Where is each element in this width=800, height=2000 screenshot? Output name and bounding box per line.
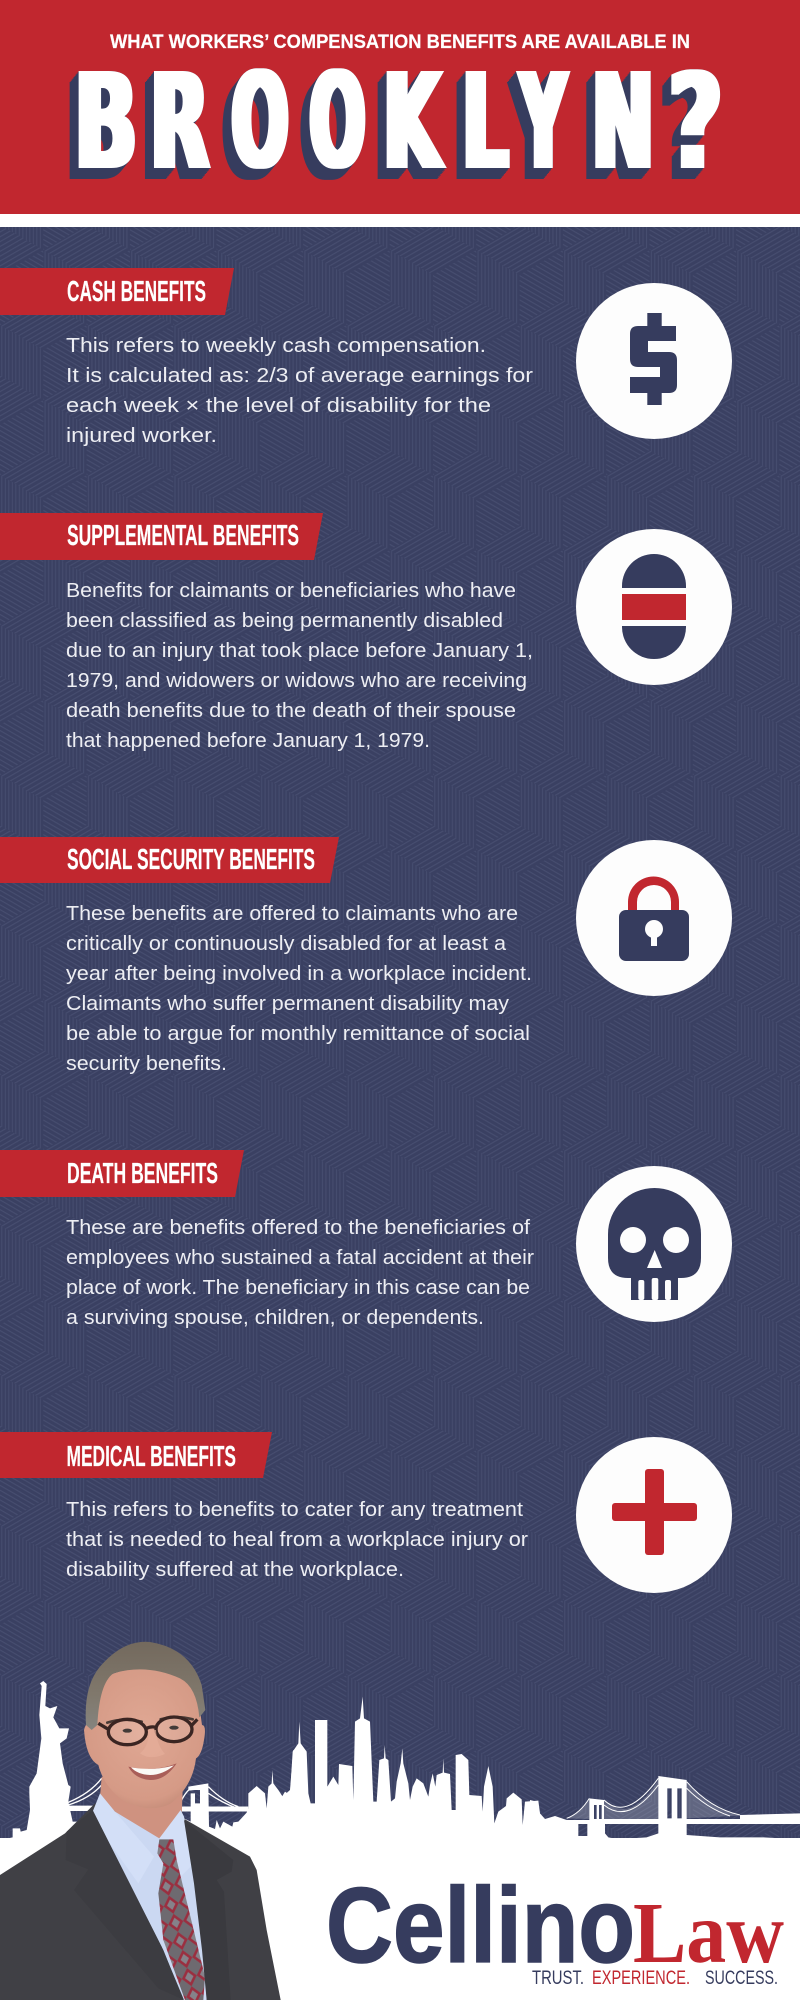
text block: cash benefits — [66, 335, 533, 447]
neck — [100, 1777, 183, 1843]
text block: social security benefits: be able to argue for monthly remittance of social — [66, 1023, 530, 1045]
suit — [0, 1803, 281, 2000]
left lapel — [66, 1810, 184, 2000]
heading ribbon: medical benefits — [0, 1432, 272, 1478]
icon: pill — [576, 529, 732, 685]
icon: padlock — [576, 840, 732, 996]
text block: death benefits: These are benefits offered to the beneficiaries of — [66, 1217, 530, 1239]
shirt collar — [91, 1793, 194, 1883]
brooklyn bridge and ground — [530, 1776, 800, 1850]
eyes — [123, 1726, 179, 1733]
title: Brooklyn?: B — [75, 46, 137, 200]
heading ribbon: death benefits: DEATH BENEFITS — [67, 1158, 218, 1190]
heading ribbon: supplemental benefits — [0, 513, 323, 560]
glasses — [98, 1717, 197, 1745]
text block: cash benefits: This refers to weekly cash compensation. — [66, 335, 486, 357]
manhattan buildings — [280, 1697, 540, 1880]
subtitle: WHAT WORKERS’ COMPENSATION BENEFITS ARE AVAILABLE IN — [110, 31, 690, 53]
text block: medical benefits: This refers to benefits to cater for any treatment — [66, 1499, 523, 1521]
title: Brooklyn?: L — [462, 46, 508, 200]
smile — [128, 1763, 177, 1780]
left bridge — [68, 1778, 248, 1809]
logo: Cellino Law — [326, 1865, 784, 1989]
hair — [86, 1642, 205, 1730]
photo: attorney portrait — [0, 1642, 281, 2000]
left bridge tower and ground — [173, 1750, 300, 1863]
text block: supplemental benefits: that happened before January 1, 1979. — [66, 730, 430, 752]
title: Brooklyn?: R — [150, 46, 209, 200]
icon: medical cross — [576, 1437, 732, 1593]
title: Brooklyn?: K — [383, 46, 444, 200]
heading ribbon: cash benefits: CASH BENEFITS — [67, 276, 206, 308]
text block: social security benefits: Claimants who suffer permanent disability may — [66, 993, 509, 1015]
text block: social security benefits: critically or continuously disabled for at least a — [66, 933, 507, 955]
text block: social security benefits — [66, 903, 532, 1075]
necktie — [157, 1839, 205, 2000]
text block: medical benefits: disability suffered at the workplace. — [66, 1559, 404, 1581]
heading ribbon: social security benefits: SOCIAL SECURITY BENEFITS — [67, 844, 315, 876]
text block: death benefits: employees who sustained a fatal accident at their — [66, 1247, 534, 1269]
panel: death benefits — [0, 1150, 732, 1329]
text block: social security benefits: security benefits. — [66, 1053, 227, 1075]
logo word: Law: Law — [633, 1884, 784, 1981]
tagline: EXPERIENCE. — [592, 1967, 690, 1989]
text block: death benefits: a surviving spouse, children, or dependents. — [66, 1307, 484, 1329]
title: Brooklyn?: N — [592, 46, 654, 200]
panel: medical benefits — [0, 1432, 732, 1593]
heading ribbon: social security benefits — [0, 837, 339, 883]
logo word: Cellino: Cellino — [326, 1865, 635, 1985]
text block: cash benefits: injured worker. — [66, 425, 217, 447]
text block: social security benefits: year after being involved in a workplace incident. — [66, 963, 532, 985]
text block: supplemental benefits: death benefits due to the death of their spouse — [66, 700, 516, 722]
right lapel — [184, 1820, 233, 2000]
header banner — [0, 0, 800, 227]
panel: supplemental benefits — [0, 513, 732, 752]
text block: cash benefits: each week × the level of disability for the — [66, 395, 491, 417]
text block: social security benefits: These benefits are offered to claimants who are — [66, 903, 518, 925]
text block: supplemental benefits: 1979, and widowers or widows who are receiving — [66, 670, 527, 692]
text block: death benefits — [66, 1217, 534, 1329]
icon: skull — [576, 1166, 732, 1322]
text block: supplemental benefits — [66, 580, 533, 752]
heading ribbon: medical benefits: MEDICAL BENEFITS — [66, 1441, 236, 1473]
text block: supplemental benefits: due to an injury that took place before January 1, — [66, 640, 533, 662]
eyebrows — [107, 1717, 193, 1723]
icon: dollar sign — [576, 283, 732, 439]
tagline — [532, 1967, 778, 1989]
text block: medical benefits — [66, 1499, 528, 1581]
panel: cash benefits — [0, 268, 732, 447]
text block: supplemental benefits: been classified as being permanently disabled — [66, 610, 503, 632]
shirt — [91, 1812, 207, 2000]
panel: social security benefits — [0, 837, 732, 1075]
heading ribbon: death benefits — [0, 1150, 244, 1197]
text block: supplemental benefits: Benefits for claimants or beneficiaries who have — [66, 580, 516, 602]
city skyline silhouette — [0, 1681, 800, 2000]
title: Brooklyn?: Y — [519, 46, 567, 200]
nose — [140, 1730, 165, 1757]
tagline: TRUST. — [532, 1967, 584, 1989]
text block: medical benefits: that is needed to heal from a workplace injury or — [66, 1529, 528, 1551]
title: Brooklyn?: O — [310, 45, 365, 199]
text block: cash benefits: It is calculated as: 2/3 of average earnings for — [66, 365, 533, 387]
heading ribbon: cash benefits — [0, 268, 234, 315]
heading ribbon: supplemental benefits: SUPPLEMENTAL BENEFITS — [67, 520, 299, 552]
face — [84, 1668, 205, 1808]
title: Brooklyn?: ? — [668, 46, 723, 200]
title: Brooklyn? — [75, 45, 723, 200]
title: Brooklyn?: O — [232, 45, 288, 199]
text block: death benefits: place of work. The beneficiary in this case can be — [66, 1277, 530, 1299]
statue of liberty — [0, 1681, 100, 1930]
